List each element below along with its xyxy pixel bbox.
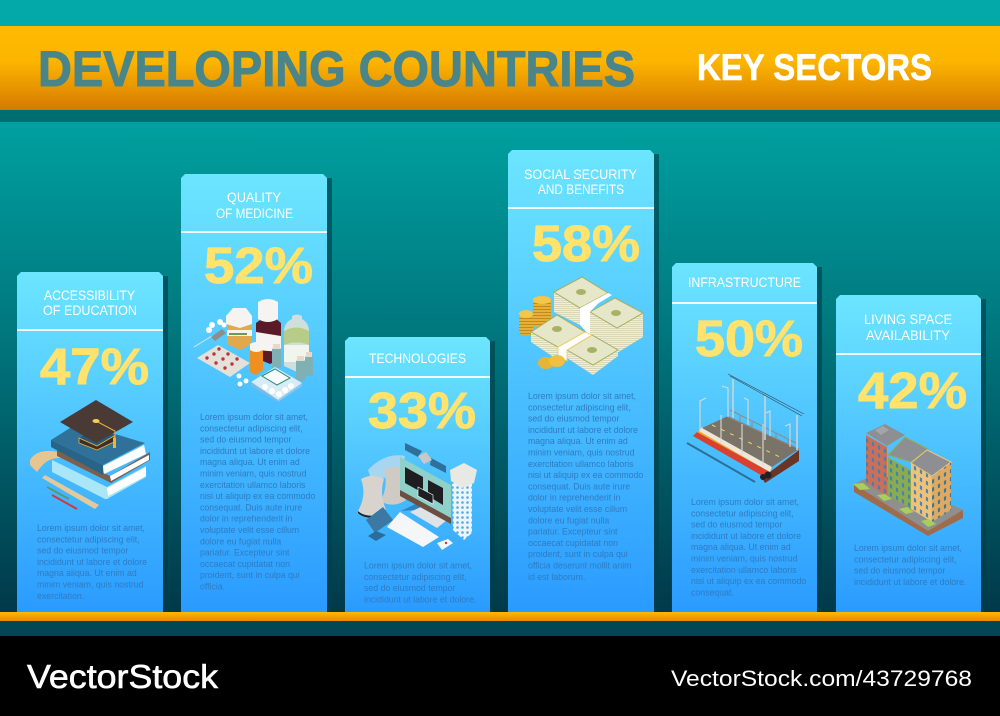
heading (43, 288, 137, 318)
watermark url text: VectorStock.com/43729768 (671, 666, 972, 691)
body text: incididunt ut labore et dolore (37, 557, 147, 567)
main gradient background (0, 122, 1000, 612)
body text (528, 391, 643, 582)
body text: incididunt ut labore et dolore. (364, 594, 476, 604)
body text: pariatur. Excepteur sint (200, 548, 290, 558)
heading: TECHNOLOGIES (369, 351, 466, 366)
body text: dolor in reprehenderit in (200, 514, 293, 524)
body text: Lorem ipsum dolor sit amet, (364, 560, 472, 570)
body text: proident, sunt in culpa qui (200, 570, 300, 580)
body text: Lorem ipsum dolor sit amet, (854, 543, 962, 553)
body text: officia deserunt mollit anim (528, 560, 631, 570)
icon: road with pipes and power lines (687, 374, 804, 483)
body text: minim veniam, quis nostrud (528, 448, 635, 458)
heading: LIVING SPACE (864, 312, 952, 327)
percentage: 47% (40, 338, 149, 395)
body text (854, 543, 966, 587)
body text: id est laborum. (528, 572, 585, 582)
heading (524, 167, 637, 197)
icon: books and graduation cap (30, 400, 150, 509)
body text: consequat. Duis aute irure (200, 502, 302, 512)
body text: dolore eu fugiat nulla (528, 515, 609, 525)
body text: Lorem ipsum dolor sit amet, (691, 497, 799, 507)
body text: Lorem ipsum dolor sit amet, (528, 391, 636, 401)
body text: voluptate velit esse cillum (200, 525, 299, 535)
body text (200, 412, 315, 592)
percentage: 50% (695, 310, 803, 367)
icon: money stacks and coins (519, 277, 643, 375)
body text: nisi ut aliquip ex ea commodo (200, 491, 315, 501)
panel: infrastructure (672, 263, 822, 612)
body text: minim veniam, quis nostrud (691, 554, 798, 564)
heading: OF EDUCATION (43, 303, 137, 318)
body text: consectetur adipiscing elit, (364, 572, 467, 582)
body text: magna aliqua. Ut enim ad (200, 457, 300, 467)
body text: exercitation ullamco laboris (691, 565, 797, 575)
body text: officia. (200, 582, 225, 592)
body text: sed do eiusmod tempor (854, 566, 946, 576)
top teal strip (0, 0, 1000, 26)
body text: dolore eu fugiat nulla (200, 536, 281, 546)
body text (364, 560, 476, 604)
bottom bar (0, 612, 1000, 636)
heading (216, 190, 293, 221)
body text: Lorem ipsum dolor sit amet, (37, 523, 145, 533)
panel: accessibility of education (17, 272, 168, 612)
percentage: 33% (368, 382, 476, 439)
body text: nisi ut aliquip ex ea commodo (528, 470, 643, 480)
body text: consectetur adipiscing elit, (691, 508, 794, 518)
heading: AVAILABILITY (866, 328, 950, 343)
watermark logo text: VectorStock (27, 658, 219, 695)
heading: AND BENEFITS (538, 182, 624, 197)
watermark footer (0, 636, 1000, 716)
panel: living space availability (836, 295, 986, 612)
body text: minim veniam, quis nostrud (200, 468, 307, 478)
body text: pariatur. Excepteur sint (528, 527, 618, 537)
body text: incididunt ut labore et dolore (528, 425, 638, 435)
heading: SOCIAL SECURITY (524, 167, 637, 182)
body text: consectetur adipiscing elit, (528, 402, 631, 412)
body text: exercitation ullamco laboris (200, 480, 306, 490)
body text: exercitation. (37, 591, 84, 601)
heading: ACCESSIBILITY (44, 288, 135, 303)
body text: consequat. (691, 587, 734, 597)
body text: proident, sunt in culpa qui (528, 549, 628, 559)
heading: INFRASTRUCTURE (688, 275, 801, 290)
heading: QUALITY (227, 190, 281, 205)
icon: computer, power plant, satellite and tower (358, 443, 477, 550)
body text: occaecat cupidatat non (528, 538, 618, 548)
body text: consectetur adipiscing elit, (854, 554, 957, 564)
body text: consectetur adipiscing elit, (200, 423, 303, 433)
title: DEVELOPING COUNTRIES (38, 41, 635, 97)
body text: consectetur adipiscing elit, (37, 534, 140, 544)
body text: sed do eiusmod tempor (37, 546, 129, 556)
body text: magna aliqua. Ut enim ad (37, 568, 137, 578)
heading: OF MEDICINE (216, 206, 293, 221)
body text: Lorem ipsum dolor sit amet, (200, 412, 308, 422)
body text: sed do eiusmod tempor (364, 583, 456, 593)
body text: minim veniam, quis nostrud (37, 580, 144, 590)
body text: incididunt ut labore et dolore (200, 446, 310, 456)
body text: magna aliqua. Ut enim ad (691, 542, 791, 552)
body text: voluptate velit esse cillum (528, 504, 627, 514)
header band (0, 26, 1000, 122)
icon: medicine bottles and pills (194, 299, 313, 402)
panel: quality of medicine (181, 174, 332, 612)
body text: exercitation ullamco laboris (528, 459, 634, 469)
body text: sed do eiusmod tempor (691, 520, 783, 530)
heading (864, 312, 952, 343)
percentage: 42% (858, 362, 967, 419)
body text: nisi ut aliquip ex ea commodo (691, 576, 806, 586)
percentage: 52% (204, 237, 313, 294)
percentage: 58% (532, 215, 640, 272)
subtitle: KEY SECTORS (697, 47, 932, 88)
body text: dolor in reprehenderit in (528, 493, 621, 503)
body text: sed do eiusmod tempor (528, 414, 620, 424)
icon: apartment buildings (853, 424, 963, 536)
panel: social security and benefits (508, 150, 659, 612)
panel: technologies (345, 337, 495, 612)
body text: consequat. Duis aute irure (528, 481, 630, 491)
body text (691, 497, 806, 597)
body text: magna aliqua. Ut enim ad (528, 436, 628, 446)
body text (37, 523, 147, 601)
body text: occaecat cupidatat non (200, 559, 290, 569)
body text: sed do eiusmod tempor (200, 435, 292, 445)
body text: incididunt ut labore et dolore (691, 531, 801, 541)
body text: incididunt ut labore et dolore. (854, 577, 966, 587)
